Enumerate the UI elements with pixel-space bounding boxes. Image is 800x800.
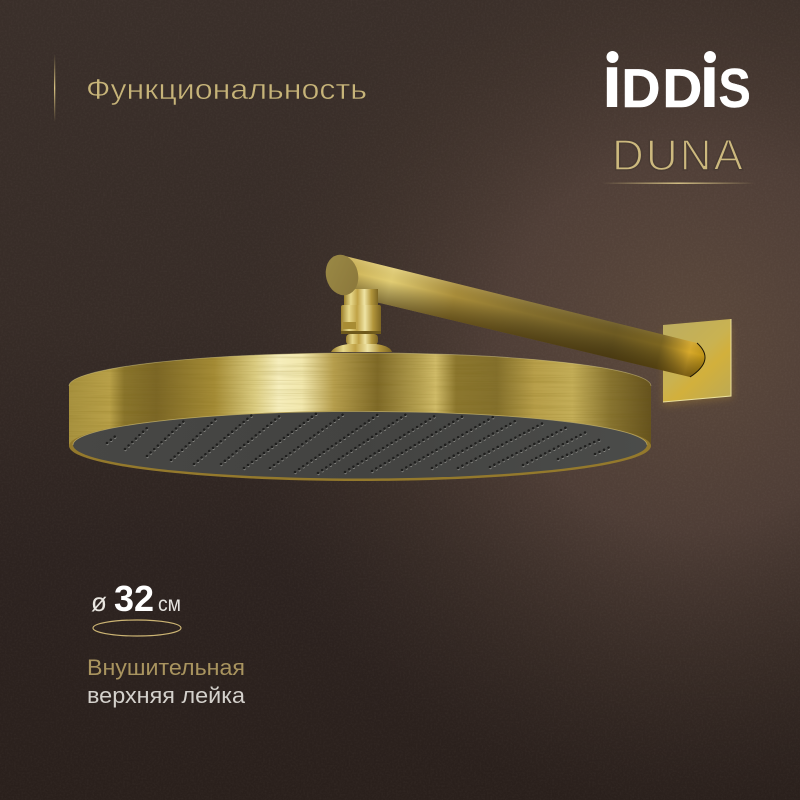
caption: верхняя лейка <box>87 683 246 708</box>
brand logo: i <box>699 39 720 123</box>
arm end cap <box>322 251 362 299</box>
caption <box>87 655 246 708</box>
diameter value: см <box>158 593 181 616</box>
product name: DUNA <box>612 131 744 180</box>
brand logo: D <box>622 58 660 119</box>
spray nozzles <box>107 413 612 474</box>
diameter value <box>91 578 181 619</box>
wall plate <box>663 319 733 406</box>
brand logo: D <box>662 57 702 119</box>
vertical accent line <box>54 54 55 122</box>
arm joint and nut <box>331 289 392 352</box>
shower head face <box>69 411 651 481</box>
brand logo: S <box>718 57 751 119</box>
shower head rim <box>68 352 652 446</box>
diameter ellipse icon <box>93 620 181 636</box>
shower arm <box>345 256 705 377</box>
underline <box>602 182 755 184</box>
brand logo: i <box>602 39 622 123</box>
diameter value: ø <box>91 587 107 617</box>
diameter value: 32 <box>114 578 154 619</box>
shower illustration <box>69 251 733 485</box>
brand logo <box>606 51 750 108</box>
caption: Внушительная <box>87 655 245 680</box>
heading: Функциональность <box>86 74 367 106</box>
